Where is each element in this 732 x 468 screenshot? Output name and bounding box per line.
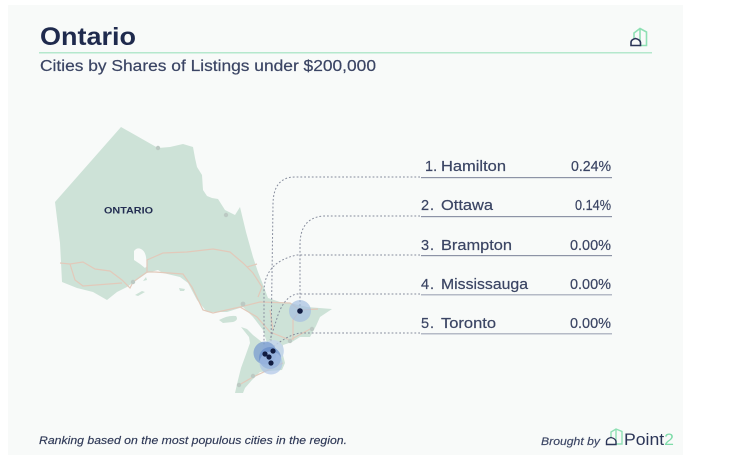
row: Brampton: 3. (421, 238, 434, 254)
row: Brampton: 0.00% (570, 238, 611, 254)
bubbles: Greater Toronto area (254, 340, 284, 374)
row: Brampton (421, 238, 612, 256)
row: Toronto: 5. (421, 316, 434, 332)
row: Ottawa: 0.14% (575, 198, 611, 214)
row: Hamilton: 1. (425, 159, 437, 175)
label: ONTARIO: ONTARIO (104, 206, 153, 216)
subtitle: Cities by Shares of Listings under $200,000 (40, 58, 376, 75)
icon: Point2 logo (606, 429, 622, 444)
row: Ottawa: 2. (421, 198, 434, 214)
row: Mississauga: Mississauga (441, 277, 529, 293)
logo wordmark: Point2 (624, 430, 674, 449)
lake (134, 248, 147, 268)
province shape (55, 127, 332, 393)
map: Ontario (55, 127, 332, 393)
row: Hamilton (421, 159, 612, 178)
islands (135, 277, 237, 323)
heading rule (39, 52, 652, 54)
bubbles: Ottawa (289, 300, 311, 322)
city markers grey (131, 146, 314, 387)
row: Mississauga: 4. (421, 277, 434, 293)
row: Mississauga (421, 277, 612, 296)
leader lines (264, 177, 420, 347)
row: Toronto: Toronto (441, 316, 496, 332)
title: Ontario (40, 23, 136, 51)
icon: header logo (631, 28, 646, 46)
ranking list (421, 159, 612, 334)
row: Hamilton: 0.24% (571, 159, 611, 175)
row: Brampton: Brampton (441, 238, 512, 254)
row: Ottawa (421, 198, 612, 217)
row: Mississauga: 0.00% (570, 277, 611, 293)
brought by: Brought by (541, 436, 602, 448)
row: Ottawa: Ottawa (441, 198, 494, 214)
roads (60, 249, 318, 385)
footnote: Ranking based on the most populous cities in the region. (39, 435, 347, 447)
row: Toronto: 0.00% (570, 316, 611, 332)
row: Hamilton: Hamilton (441, 159, 506, 175)
row: Toronto (421, 316, 612, 334)
